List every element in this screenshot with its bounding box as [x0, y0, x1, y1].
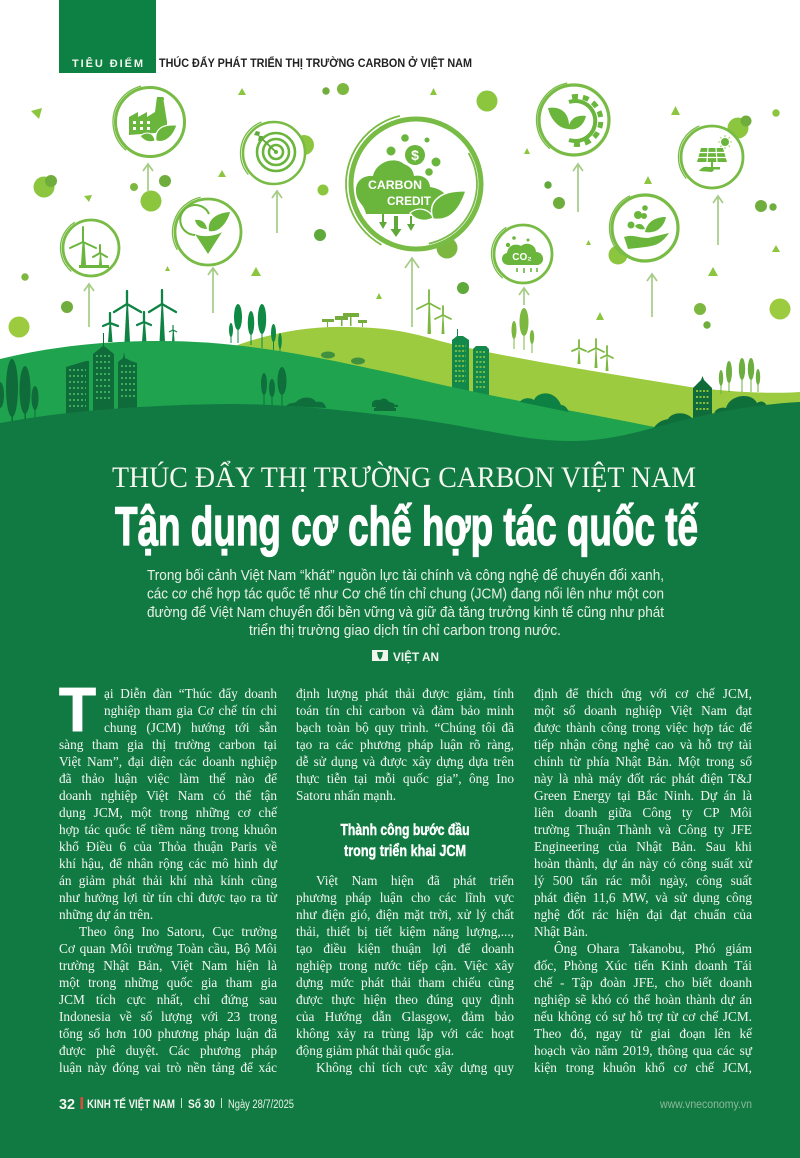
article column 2: nghiệp trong nước tiếp cận. Việc xây: [296, 958, 514, 973]
footer: [59, 1096, 752, 1113]
article column 3: Theo đó, ngay từ giai đoạn lên kế: [534, 1026, 752, 1041]
upward arrows: [84, 164, 723, 327]
article column 2: Satoru nhấn mạnh.: [296, 788, 396, 803]
article column 3: Green Energy tại Bắc Ninh. Dự án là: [534, 788, 752, 803]
intro paragraph: các cơ chế hợp tác quốc tế như Cơ chế tín chỉ chung (JCM) đang nổi lên như một con: [147, 586, 664, 602]
article column 3: định để thích ứng với cơ chế JCM,: [534, 686, 752, 700]
article column 3: nghệ đốt rác hiện đại đạt chuẩn của: [534, 907, 752, 922]
article column 1: trường Nhật Bản, Việt Nam hiện là: [59, 958, 277, 973]
icon: target and arrow: [227, 106, 321, 200]
article column 1: như hưởng lợi từ tín chỉ được tạo ra từ: [59, 890, 277, 905]
scenery on the light hill: [321, 290, 760, 394]
icon: wind turbines: [48, 205, 134, 291]
article column 3: đốc, Phòng Xúc tiến Kinh doanh Tái: [534, 958, 752, 973]
article column 3: này là nhà máy đốt rác phát điện T&J: [534, 771, 752, 786]
subheading: [340, 822, 470, 860]
article column 2: tạo ra các phương pháp luận rõ ràng,: [296, 737, 514, 752]
label: carbon credit: CARBON: [368, 180, 422, 192]
article column 3: hoạch vào năm 2019, thông qua các sự: [534, 1043, 752, 1058]
article column 2: tạo điều kiện thuận lợi để doanh: [296, 941, 514, 956]
article column 1: nghiệp tham gia Cơ chế tín chỉ: [104, 703, 277, 718]
article column 3: tiếp nhận công nghệ cao và hỗ trợ tài: [534, 737, 752, 752]
byline: VIỆT AN: [393, 649, 439, 664]
byline: [372, 649, 439, 664]
article column 2: của Hướng dẫn Glasgow, đảm bảo: [296, 1009, 514, 1024]
article column 3: Nhật Bản.: [534, 924, 588, 939]
icon: factory and leaves: [98, 70, 202, 174]
footer: Số 30: [188, 1099, 215, 1111]
article column 2: thải, thiết bị tiết kiệm năng lượng,...,: [296, 924, 514, 939]
wind turbines on the mid hill: [103, 290, 177, 342]
icon: carbon credit: CREDIT: [387, 196, 431, 208]
section running title: THÚC ĐẨY PHÁT TRIỂN THỊ TRƯỜNG CARBON Ở VIỆT NAM: [159, 57, 472, 70]
article column 2: dễ sử dụng và được xây dựng dựa trên: [296, 754, 514, 769]
article column 2: toán tín chỉ carbon và đảm bảo minh: [296, 703, 514, 718]
footer: www.vneconomy.vn: [659, 1099, 752, 1111]
article column 3: lý 500 tấn rác mỗi ngày, công suất: [534, 873, 752, 888]
footer: Ngày 28/7/2025: [228, 1099, 294, 1111]
city buildings right: [452, 329, 489, 396]
footer: KINH TẾ VIỆT NAM: [87, 1098, 175, 1111]
car on front hill edge: [374, 401, 396, 411]
article column 1: những dự án trên.: [59, 907, 153, 922]
article column 3: [534, 686, 752, 1075]
label: CO2: CO₂: [512, 252, 532, 263]
domed building and bushes right: [653, 376, 767, 429]
article column 1: Indonesia về số lượng với 23 trong: [59, 1009, 277, 1024]
icon: CO2 cloud: [479, 210, 567, 298]
article column 1: chung (JCM) hướng tới sẵn: [104, 720, 277, 735]
article column 1: [59, 686, 278, 1075]
article column 1: một trong những quốc gia tham gia: [59, 975, 277, 990]
article column 2: [296, 686, 514, 1075]
article column 1: hợp tác quốc tế tiềm năng trong khuôn: [59, 822, 277, 837]
article column 3: chế - Tập đoàn JFE, cho biết doanh: [534, 975, 752, 990]
icon: hand with coins and leaf: [595, 178, 695, 278]
article column 2: bạch toàn bộ quy trình. “Chúng tôi đã: [296, 720, 514, 735]
article column 2: được thực hiện theo đúng quy định: [296, 992, 514, 1007]
article column 3: chính từ phía Nhật Bản. Một trong số: [534, 754, 752, 769]
article column 1: JCM tích cực nhất, chỉ đứng sau: [59, 992, 277, 1007]
article column 3: trường Thuận Thành và Công ty JFE: [534, 822, 752, 837]
front dark hill: [0, 402, 800, 470]
article column 1: luận này đóng vai trò nền tảng để xác: [59, 1060, 277, 1075]
article column 1: dụng JCM, một trong những cơ chế: [59, 805, 277, 820]
article column 3: nếu không có sự hỗ trợ từ cơ chế JCM.: [534, 1009, 752, 1024]
article column 1: án giảm phát thải khí nhà kính cũng: [59, 873, 277, 888]
icon: gear and leaves: [521, 67, 627, 173]
article column 1: được phê duyệt. Các phương pháp: [59, 1043, 277, 1058]
article column 1: doanh nghiệp Việt Nam có thể tận: [59, 788, 277, 803]
article column 3: liên doanh giữa Công ty CP Môi: [534, 805, 752, 820]
bushes and cars on the mid hill: [261, 367, 569, 412]
article column 2: định lượng phát thải được giảm, tính: [296, 686, 514, 700]
article column 1: khí hậu, để nhân rộng các mô hình dự: [59, 856, 277, 871]
article column 2: dựng mức phát thải tham chiếu cũng: [296, 975, 514, 990]
icon: carbon credit: $: [411, 147, 419, 163]
article column 3: Engineering của Nhật Bản. Sau khi: [534, 839, 752, 854]
mid green hill: [0, 341, 660, 460]
light green hill: [235, 327, 800, 450]
article column 1: Theo ông Ino Satoru, Cục trưởng: [79, 924, 277, 939]
subheading: trong triển khai JCM: [344, 843, 466, 860]
article column 3: phát điện 11,6 MW, và sử dụng công: [534, 890, 752, 905]
section tab: Tiêu điểm: [59, 0, 156, 73]
article column 3: hoàn thành, dự án này có công suất xử: [534, 856, 752, 871]
article column 1: đã thảo luận việc làm thế nào để: [59, 771, 277, 786]
trees behind the mid hill: [229, 304, 282, 352]
subheading: Thành công bước đầu: [340, 822, 470, 839]
article column 1: Cơ quan Môi trường Toàn cầu, Bộ Môi: [59, 941, 277, 956]
article column 3: nghiệp sẽ khó có thể hoàn thành dự án: [534, 992, 752, 1007]
decorative dots and triangles: [8, 83, 790, 338]
article column 2: không xảy ra trùng lặp với các hoạt: [296, 1026, 514, 1041]
article column 2: Không chỉ tích cực xây dựng quy: [316, 1060, 514, 1075]
article column 3: được thành công trong việc hợp tác để: [534, 720, 752, 735]
article column 3: kiện trong khuôn khổ cơ chế JCM,: [534, 1060, 752, 1075]
article column 3: một số doanh nghiệp Việt Nam đạt: [534, 703, 752, 718]
footer: 32: [59, 1096, 75, 1113]
intro paragraph: triển thị trường giao dịch tín chỉ carbon trong nước.: [249, 623, 561, 639]
intro paragraph: đường để Việt Nam chuyển đổi bền vững và giữ đà tăng trưởng kinh tế cũng như phát: [147, 605, 664, 621]
article column 2: Việt Nam hiện đã phát triển: [316, 873, 514, 888]
article column 1: tổng số hơn 100 phương pháp luận đã: [59, 1026, 277, 1041]
trees left: [0, 359, 38, 434]
article column 2: phương pháp luận cho các lĩnh vực: [296, 890, 514, 905]
article column 2: động giảm phát thải quốc gia.: [296, 1043, 454, 1058]
city buildings left: [66, 333, 137, 417]
article column 2: như điện gió, điện mặt trời, xử lý chất: [296, 907, 514, 922]
article column 3: Ông Ohara Takanobu, Phó giám: [554, 941, 752, 956]
section tab: Tiêu điểm: TIÊU ĐIỂM: [72, 57, 143, 70]
article column 1: khổ Điều 6 của Thỏa thuận Paris về: [59, 839, 277, 854]
article column 2: thực tiễn tại mỗi quốc gia”, ông Ino: [296, 771, 514, 786]
icon: solar panel: [665, 110, 759, 204]
intro paragraph: [147, 568, 664, 639]
drop cap T: T: [59, 676, 96, 745]
icon: carbon credit: [320, 88, 512, 280]
article column 1: sàng tham gia thị trường carbon tại: [59, 737, 277, 752]
article column 1: ại Diễn đàn “Thúc đẩy doanh: [104, 686, 277, 700]
article column 1: Việt Nam”, đại diện các doanh nghiệp: [59, 754, 277, 769]
intro paragraph: Trong bối cảnh Việt Nam “khát” nguồn lực tài chính và công nghệ để chuyển đổi xanh,: [147, 568, 664, 584]
supertitle: THÚC ĐẨY THỊ TRƯỜNG CARBON VIỆT NAM: [112, 461, 696, 494]
icon: sprout in pin: [160, 184, 256, 280]
